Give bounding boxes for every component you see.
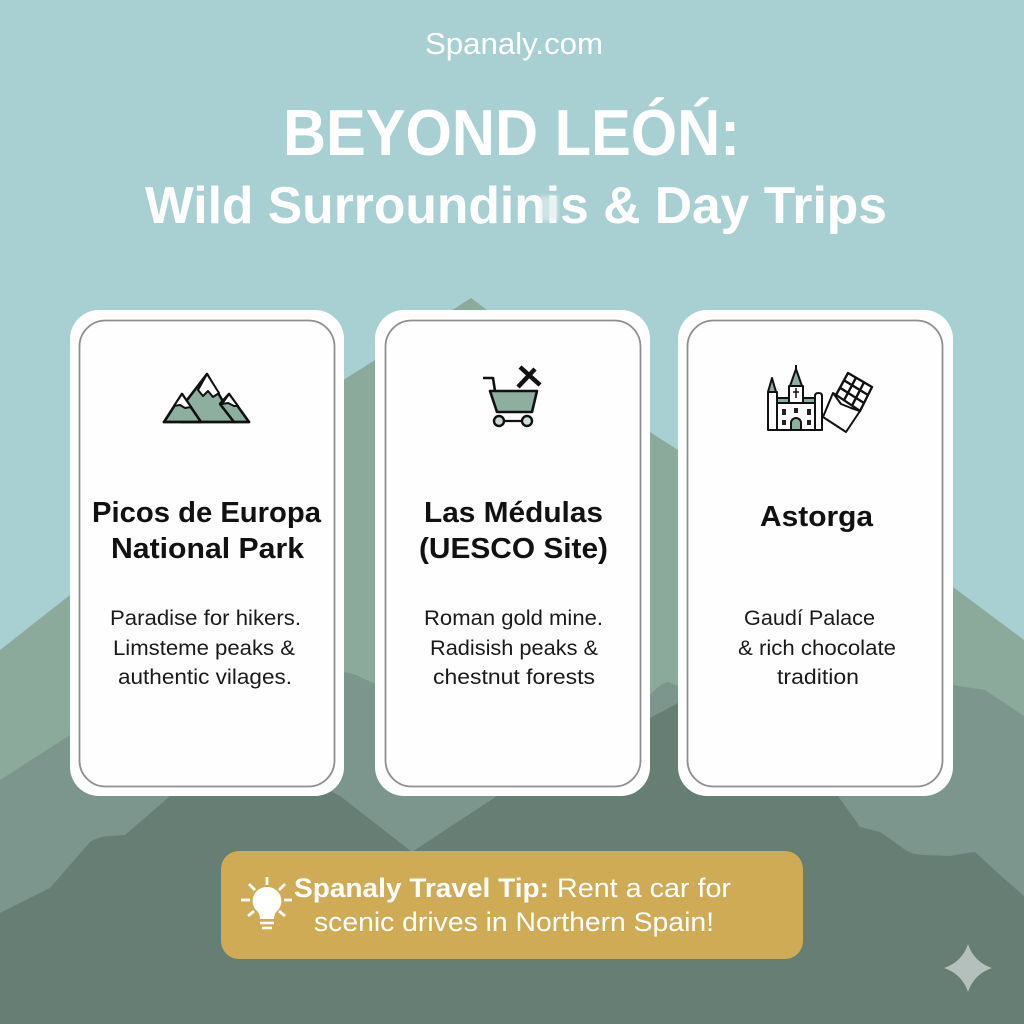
heading xyxy=(92,497,322,565)
title smudge artifact xyxy=(540,196,558,221)
heading: Astorga xyxy=(760,501,874,533)
description xyxy=(110,607,301,689)
description: & rich chocolate xyxy=(738,637,896,660)
description: Gaudí Palace xyxy=(744,607,875,630)
description: tradition xyxy=(777,666,859,689)
panel: Astorga xyxy=(678,310,953,796)
subtitle: Wild Surroundinis & Day Trips xyxy=(145,177,887,235)
description: chestnut forests xyxy=(433,666,595,689)
icon: palace and chocolate xyxy=(768,365,872,432)
icon: sparkle xyxy=(944,944,992,992)
background: front mountain ridge xyxy=(0,703,1024,1024)
panel: Las Médulas xyxy=(375,310,650,796)
tip text: Spanaly Travel Tip: xyxy=(294,873,549,903)
title xyxy=(145,96,887,235)
tip text: Rent a car for xyxy=(557,873,731,903)
description xyxy=(738,607,896,689)
tip text xyxy=(294,873,731,937)
background: middle mountain ridge xyxy=(0,640,1024,1024)
icon: cart with crossed tools xyxy=(483,367,540,426)
tip text: scenic drives in Northern Spain! xyxy=(314,907,714,937)
card frame xyxy=(375,310,650,796)
description: authentic vilages. xyxy=(118,666,292,689)
callout: travel tip xyxy=(221,851,803,959)
heading: Picos de Europa xyxy=(92,497,322,529)
description: Limsteme peaks & xyxy=(113,637,295,660)
card frame xyxy=(678,310,953,796)
icon: light bulb xyxy=(241,877,292,928)
callout background xyxy=(221,851,803,959)
title: BEYOND LEÓŃ: xyxy=(283,96,740,169)
description: Roman gold mine. xyxy=(424,607,603,630)
description xyxy=(424,607,603,689)
card frame xyxy=(70,310,344,796)
panel: Picos de Europa xyxy=(70,310,344,796)
description: Paradise for hikers. xyxy=(110,607,301,630)
description: Radisish peaks & xyxy=(430,637,598,660)
icon: mountains xyxy=(164,374,249,422)
site name: Spanaly.com xyxy=(425,26,603,61)
background: far mountain xyxy=(0,298,1024,1024)
heading: (UESCO Site) xyxy=(419,533,608,565)
heading xyxy=(419,497,608,565)
heading: Las Médulas xyxy=(424,497,603,529)
heading: National Park xyxy=(111,533,305,565)
